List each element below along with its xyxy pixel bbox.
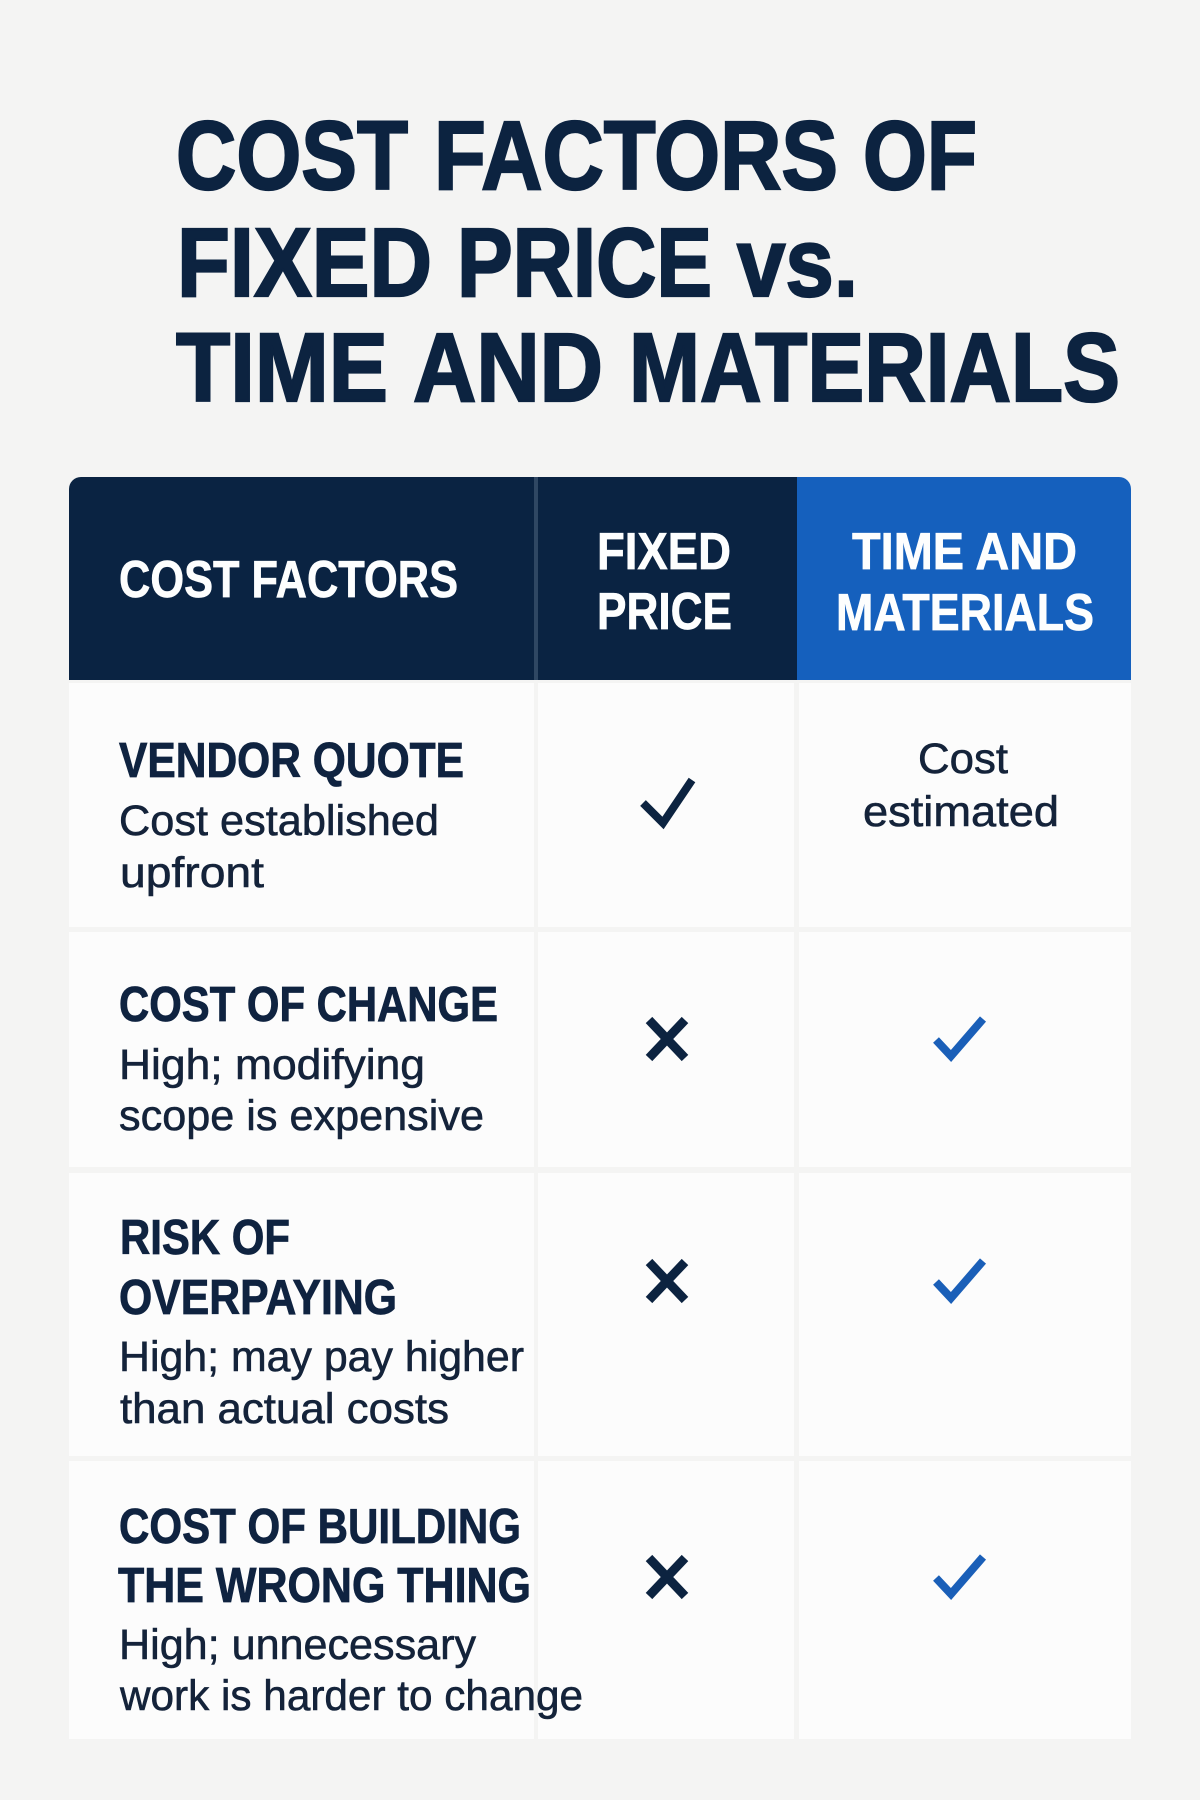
row 2 cell backgrounds	[69, 932, 1131, 1167]
row 3 label: OVERPAYING	[119, 1271, 397, 1325]
icon: fixed price cross	[649, 1558, 685, 1596]
row 2 label: scope is expensive	[119, 1092, 484, 1140]
row 3 label: High; may pay higher	[119, 1333, 524, 1381]
row 3 label: RISK OF	[120, 1211, 290, 1265]
row 3 label	[119, 1211, 524, 1433]
header cell: time and materials	[797, 477, 1131, 680]
header cell: cost factors	[69, 477, 535, 680]
title: FACTORS	[434, 101, 838, 210]
row 3 cell backgrounds	[69, 1173, 1131, 1456]
row: cost of building the wrong thing	[69, 1461, 1131, 1739]
icon: time and materials check	[936, 1557, 983, 1594]
title: OF	[863, 101, 977, 210]
icon: fixed price cross	[649, 1262, 685, 1300]
row: risk of overpaying	[69, 1173, 1131, 1456]
row 1 cell backgrounds	[69, 683, 1131, 927]
row 2 label	[119, 978, 498, 1140]
row 4 label: COST OF BUILDING	[119, 1500, 521, 1554]
row: vendor quote	[69, 683, 1131, 927]
row: cost of change	[69, 932, 1131, 1167]
title	[176, 101, 1120, 422]
title: vs.	[737, 208, 858, 317]
title: PRICE	[457, 208, 712, 317]
title: MATERIALS	[629, 313, 1120, 422]
title: TIME	[176, 313, 388, 422]
row 2 label: COST OF CHANGE	[119, 978, 498, 1032]
title: FIXED	[177, 208, 432, 317]
row 2 label: High; modifying	[119, 1041, 425, 1089]
time and materials note: Cost	[918, 735, 1008, 783]
header cell: fixed price	[534, 477, 797, 680]
row 4 label	[118, 1500, 583, 1720]
icon: time and materials check	[936, 1261, 983, 1298]
header cell: cost factors: COST FACTORS	[119, 551, 458, 609]
icon: fixed price cross	[649, 1020, 685, 1058]
time and materials note: estimated	[863, 788, 1059, 836]
row 4 label: THE WRONG THING	[118, 1559, 531, 1613]
row 1 label: Cost established	[119, 797, 439, 845]
header cell: time and materials: TIME AND	[852, 523, 1077, 581]
header cell: fixed price: PRICE	[597, 583, 732, 641]
time and materials note	[863, 735, 1059, 836]
header cell: time and materials: MATERIALS	[836, 584, 1094, 642]
header row	[69, 477, 1131, 680]
icon: fixed price check	[643, 780, 692, 823]
icon: time and materials check	[936, 1019, 983, 1056]
row 4 label: High; unnecessary	[119, 1621, 476, 1669]
row 3 label: than actual costs	[120, 1385, 449, 1433]
title: COST	[176, 101, 408, 210]
row 1 label	[119, 734, 464, 897]
comparison table	[69, 477, 1131, 1739]
row 1 label: VENDOR QUOTE	[119, 734, 464, 788]
title: AND	[413, 313, 603, 422]
row 1 label: upfront	[120, 849, 264, 897]
header cell: fixed price: FIXED	[597, 523, 731, 581]
row 4 cell backgrounds	[69, 1461, 1131, 1739]
row 4 label: work is harder to change	[119, 1672, 583, 1720]
